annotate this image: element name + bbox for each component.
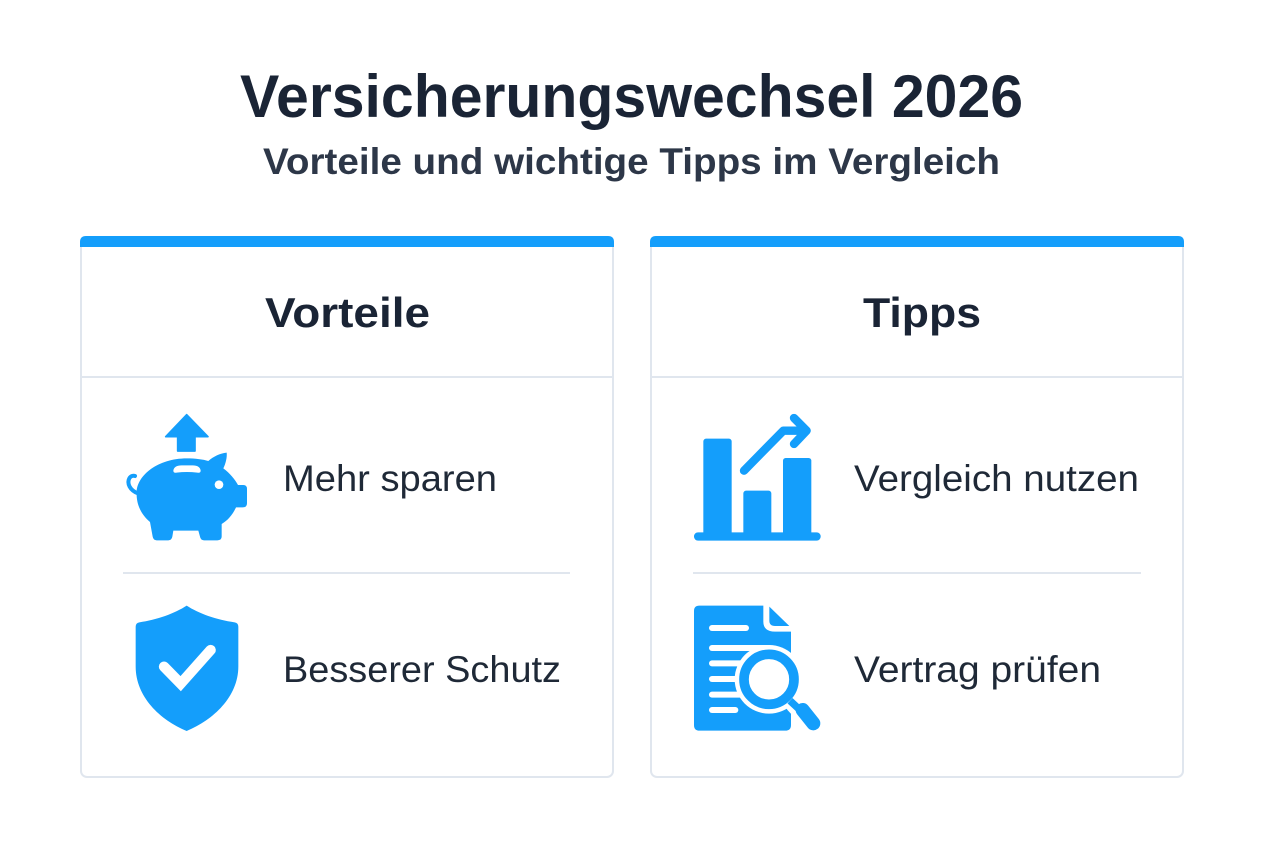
icon: piggy bank with up arrow	[128, 415, 247, 540]
panel: Vorteile	[80, 236, 614, 777]
heading: Vorteile: Vorteile	[265, 289, 430, 336]
label: Besserer Schutz: Besserer Schutz	[283, 649, 561, 690]
label: Mehr sparen: Mehr sparen	[283, 458, 497, 499]
label: Vergleich nutzen: Vergleich nutzen	[854, 458, 1139, 499]
title: Versicherungswechsel 2026	[240, 63, 1023, 130]
icon: document with magnifier	[694, 606, 813, 731]
subtitle: Vorteile und wichtige Tipps im Vergleich	[263, 141, 1000, 182]
panel: Tipps	[650, 236, 1184, 777]
icon: bar chart with arrow	[694, 418, 821, 541]
label: Vertrag prüfen: Vertrag prüfen	[854, 649, 1101, 690]
icon: shield with check	[136, 606, 238, 731]
heading: Tipps: Tipps	[863, 289, 981, 336]
